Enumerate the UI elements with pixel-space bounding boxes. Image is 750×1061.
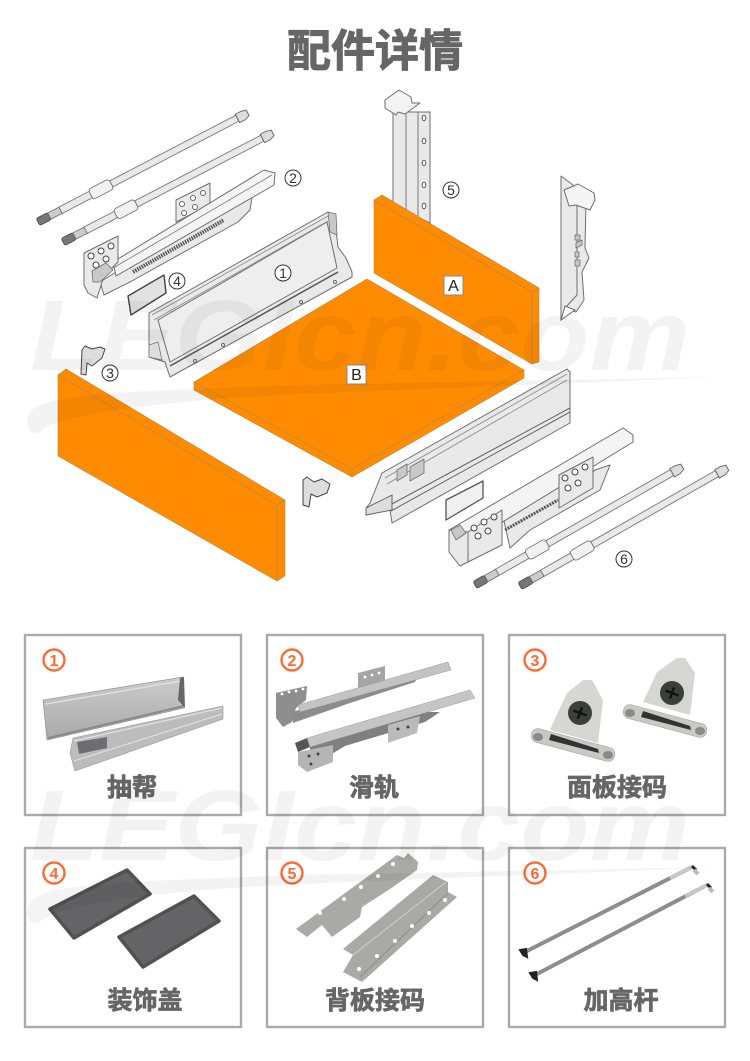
panel: 5 back connector bbox=[267, 848, 483, 1027]
icon: front connectors bbox=[530, 658, 708, 763]
callout 3 bbox=[102, 365, 118, 381]
panel: 6 height rods bbox=[509, 848, 725, 1027]
label: 滑轨 bbox=[349, 774, 399, 802]
label: A: A bbox=[448, 278, 459, 295]
panel: 3 front connector bbox=[509, 635, 725, 815]
panel: 2 slide rail bbox=[267, 635, 483, 815]
watermark: upper bbox=[27, 280, 722, 433]
part: upper decorative cap bbox=[128, 275, 166, 315]
watermark: upper: LEGIcn.com bbox=[30, 280, 690, 392]
badge 4 bbox=[44, 862, 64, 884]
part: lower decorative cap bbox=[446, 481, 483, 520]
icon: back connectors bbox=[296, 853, 457, 982]
badge 5 bbox=[282, 862, 302, 884]
part: bottom board B bbox=[194, 279, 524, 477]
badge 1: 1 bbox=[50, 653, 59, 670]
label: A bbox=[444, 276, 463, 295]
icon: drawer side panels bbox=[43, 677, 223, 771]
part: upper face bracket bbox=[81, 346, 105, 375]
part: lower drawer rail bbox=[449, 428, 633, 566]
badge 6 bbox=[524, 862, 546, 884]
badge 5: 5 bbox=[288, 866, 297, 883]
label: 面板接码 bbox=[567, 774, 667, 802]
label: 背板接码 bbox=[325, 987, 425, 1015]
callout 5: 5 bbox=[447, 182, 455, 198]
callout 2: 2 bbox=[289, 170, 297, 186]
watermark: lower: LEGIcn.com bbox=[30, 770, 690, 882]
part: upper drawer rail bbox=[84, 170, 275, 298]
callout 6: 6 bbox=[620, 551, 628, 567]
part: left back connector bbox=[385, 90, 430, 223]
label: B bbox=[347, 365, 366, 384]
callout 4 bbox=[169, 273, 185, 289]
badge 3 bbox=[524, 650, 546, 670]
icon: slide rails bbox=[276, 662, 475, 772]
part: upper height rods bbox=[35, 108, 275, 247]
part: lower face bracket bbox=[303, 477, 330, 507]
callout 5 bbox=[443, 182, 459, 198]
icon: cover plates bbox=[50, 870, 219, 967]
badge 2: 2 bbox=[288, 653, 297, 670]
label: 装饰盖 bbox=[107, 987, 183, 1015]
callout 1: 1 bbox=[279, 265, 287, 281]
badge 3: 3 bbox=[531, 653, 540, 670]
label: 抽帮 bbox=[107, 774, 157, 802]
title: 配件详情 bbox=[287, 27, 463, 76]
part: lower height rods bbox=[472, 462, 730, 591]
label: B: B bbox=[351, 367, 362, 384]
panel: exploded drawer diagram bbox=[35, 90, 730, 591]
callout 1 bbox=[275, 265, 291, 281]
part: right back connector bbox=[561, 176, 595, 320]
badge 4: 4 bbox=[50, 866, 59, 883]
part: front board bbox=[58, 369, 285, 581]
panel: 1 drawer side bbox=[25, 635, 241, 815]
part: side panel bbox=[149, 212, 352, 377]
callout 4: 4 bbox=[173, 273, 181, 289]
icon: height rods bbox=[520, 866, 713, 980]
badge 1 bbox=[44, 650, 64, 670]
badge 2 bbox=[282, 650, 302, 670]
watermark: lower bbox=[27, 770, 722, 923]
callout 2 bbox=[285, 170, 301, 186]
label: 加高杆 bbox=[583, 987, 659, 1015]
part: lower side panel bbox=[366, 369, 570, 523]
panel: 4 decorative cover bbox=[25, 848, 241, 1027]
callout 3: 3 bbox=[106, 365, 114, 381]
badge 6: 6 bbox=[531, 866, 540, 883]
callout 6 bbox=[616, 551, 632, 567]
part: back board A bbox=[374, 195, 539, 364]
